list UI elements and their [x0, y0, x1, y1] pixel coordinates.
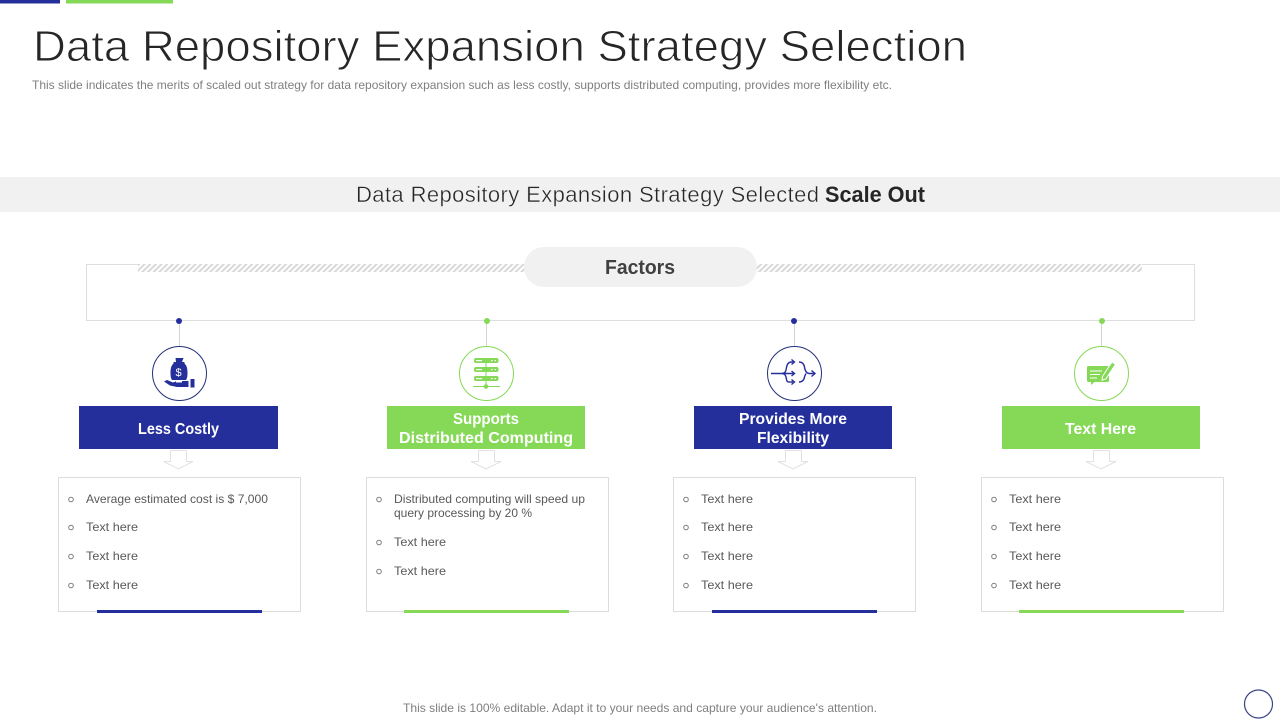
factors label: Factors: [605, 257, 675, 279]
icon: money bag on hand: $: [175, 367, 182, 379]
corner circle: [1244, 690, 1272, 718]
icon: money bag on hand: [152, 346, 206, 400]
text box: [982, 478, 1224, 613]
heading bar: Distributed Computing: [399, 430, 573, 447]
text box: Text here: [701, 520, 753, 534]
banner: strategy selected: Data Repository Expansion Strategy Selected: [356, 182, 819, 207]
text box: Text here: [394, 535, 446, 549]
arrow: [1086, 450, 1116, 469]
text box: Text here: [701, 578, 753, 592]
text box: Text here: [86, 578, 138, 592]
banner: strategy selected: Scale Out: [825, 182, 926, 207]
heading bar: Provides More: [739, 411, 847, 428]
text box: Text here: [1009, 492, 1061, 506]
text box: Text here: [701, 492, 753, 506]
arrow: [471, 450, 501, 469]
heading bar: [1002, 406, 1200, 449]
column 2: supports distributed computing: [366, 318, 608, 613]
heading bar: Flexibility: [757, 430, 829, 447]
subtitle: This slide indicates the merits of scaled out strategy for data repository expansion such as less costly, supports distributed computing, provides more flexibility etc.: [32, 78, 892, 92]
connector dot: [1099, 318, 1105, 346]
connector dot: [484, 318, 490, 346]
icon: speech bubble with pencil: [1074, 346, 1128, 400]
heading bar: [79, 406, 278, 449]
connector dot: [176, 318, 182, 346]
top accent bars: [0, 0, 173, 4]
text box: [674, 478, 916, 613]
heading bar: [694, 406, 892, 449]
text box: [366, 478, 608, 613]
title: Data Repository Expansion Strategy Selection: [33, 22, 967, 71]
banner: strategy selected: [0, 177, 1280, 212]
connector dot: [791, 318, 797, 346]
heading bar: Text Here: [1065, 421, 1136, 438]
text box: Average estimated cost is $ 7,000: [86, 492, 268, 506]
arrow: [778, 450, 808, 469]
column 1: less costly: [58, 318, 300, 613]
heading bar: Less Costly: [138, 421, 219, 438]
icon: branching arrows: [768, 346, 822, 400]
text box: [58, 478, 300, 613]
factors frame: [86, 247, 1194, 320]
text box: Text here: [1009, 578, 1061, 592]
text box: Text here: [1009, 520, 1061, 534]
text box: Text here: [1009, 549, 1061, 563]
heading bar: [387, 406, 585, 449]
text box: Text here: [86, 520, 138, 534]
text box: Text here: [86, 549, 138, 563]
text box: Text here: [701, 549, 753, 563]
arrow: [164, 450, 193, 469]
column 4: text here: [982, 318, 1224, 613]
footer note: This slide is 100% editable. Adapt it to your needs and capture your audience's attention.: [403, 701, 877, 715]
heading bar: Supports: [453, 411, 519, 428]
text box: query processing by 20 %: [394, 506, 532, 520]
column 3: provides more flexibility: [674, 318, 916, 613]
text box: Text here: [394, 564, 446, 578]
icon: servers: [460, 346, 514, 400]
text box: Distributed computing will speed up: [394, 492, 585, 506]
